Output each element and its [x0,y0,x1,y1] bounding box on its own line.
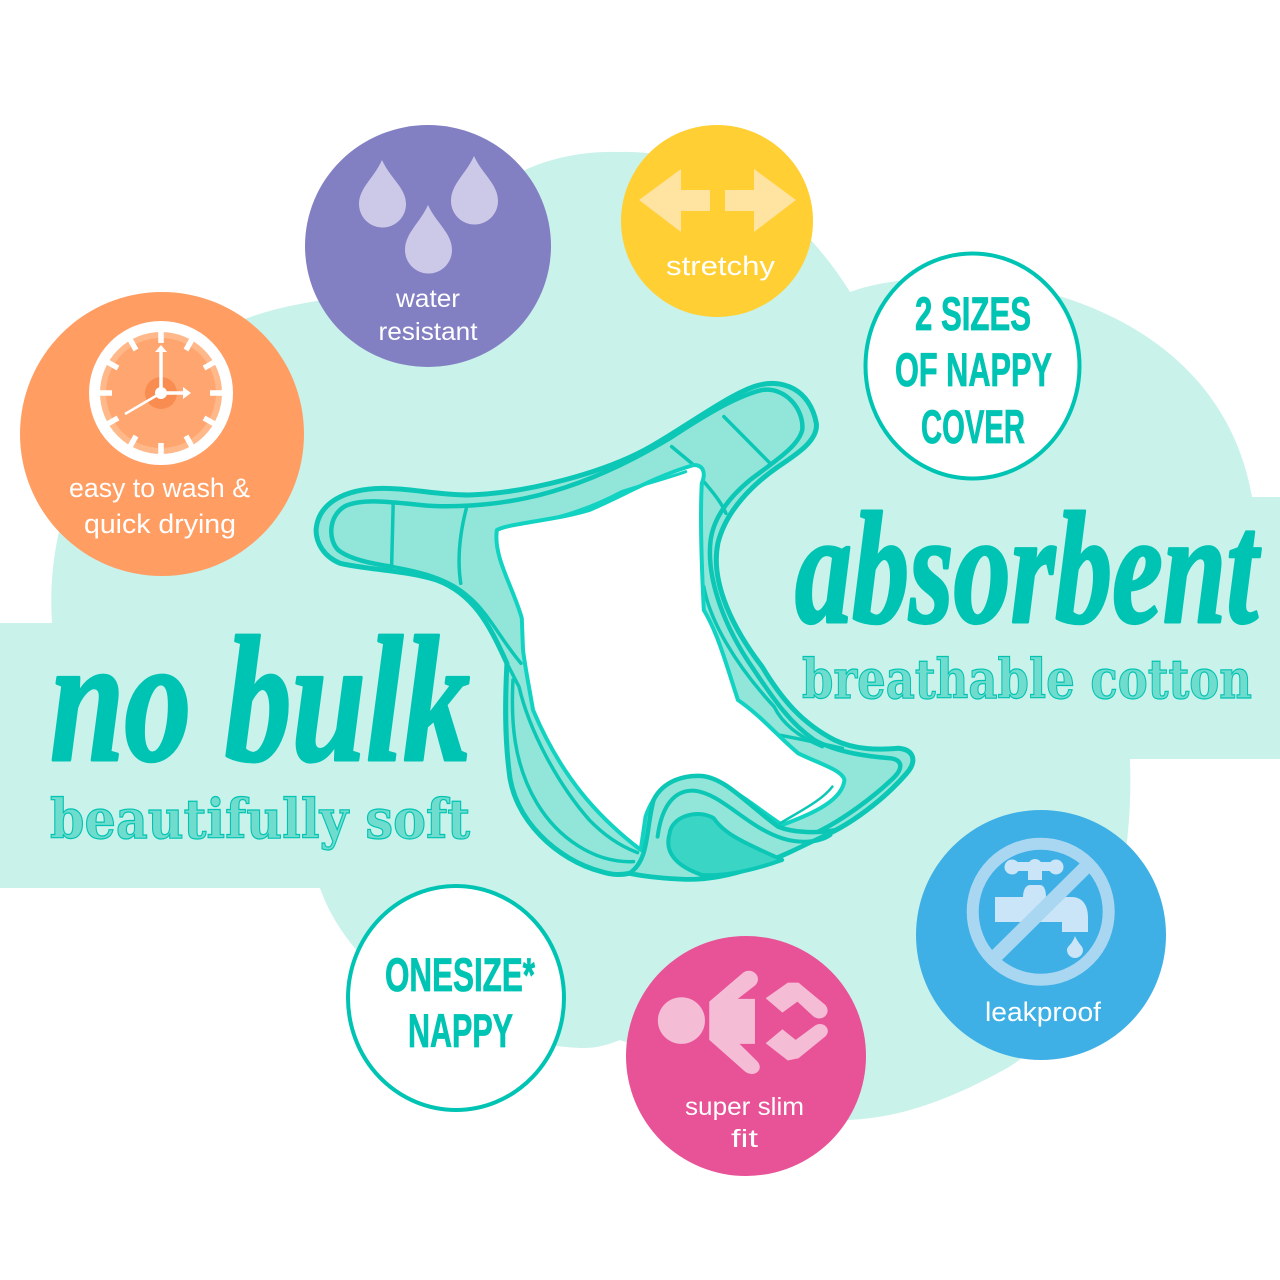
label: water resistant: water [395,285,460,313]
icon: no tap [973,844,1109,980]
icon: stretch arrows [639,169,796,232]
circle: stretchy [621,125,813,317]
circle: easy to wash and quick drying [20,292,304,576]
label: 2 sizes of nappy cover: 2 SIZES [915,287,1031,340]
circle: water resistant [305,125,551,367]
circle: 2 sizes of nappy cover [866,254,1080,478]
label: 2 sizes of nappy cover [895,287,1052,453]
label: onesize nappy: NAPPY [408,1004,513,1057]
nappy outer shell [316,383,913,879]
label: water resistant: resistant [378,318,478,346]
label: easy to wash and quick drying: quick drying [84,509,236,539]
label: super slim fit: super slim [685,1093,804,1121]
label: super slim fit: fit [731,1125,758,1153]
label: 2 sizes of nappy cover: OF NAPPY [895,343,1052,396]
circle: super slim fit [626,936,866,1176]
nappy inner tab [668,814,782,875]
nappy white pad [496,465,844,850]
icon: water drops [359,156,498,273]
illustration: nappy [316,383,913,879]
label: easy to wash and quick drying: easy to wash & [69,473,250,503]
nappy front flap [629,776,836,879]
nappy inner binding lines [331,390,900,862]
headline: no bulk: no bulk [50,600,470,799]
nappy pad crease lines [525,472,832,823]
label: 2 sizes of nappy cover: COVER [921,400,1025,453]
label: onesize nappy [385,948,535,1057]
label: leakproof: leakproof [985,997,1102,1027]
label: water resistant [378,285,478,346]
background blob [0,152,1280,1120]
icon: slim fit baby [658,971,828,1074]
label: easy to wash and quick drying [69,473,250,539]
label: stretchy: stretchy [666,251,776,281]
nappy flap inner line [658,791,830,842]
label: onesize nappy: ONESIZE* [385,948,535,1001]
icon: clock [94,326,228,460]
circle: onesize nappy [348,886,564,1110]
circle: leakproof [916,810,1166,1060]
label: super slim fit [685,1093,804,1153]
subhead: beautifully soft: beautifully soft [50,787,470,851]
